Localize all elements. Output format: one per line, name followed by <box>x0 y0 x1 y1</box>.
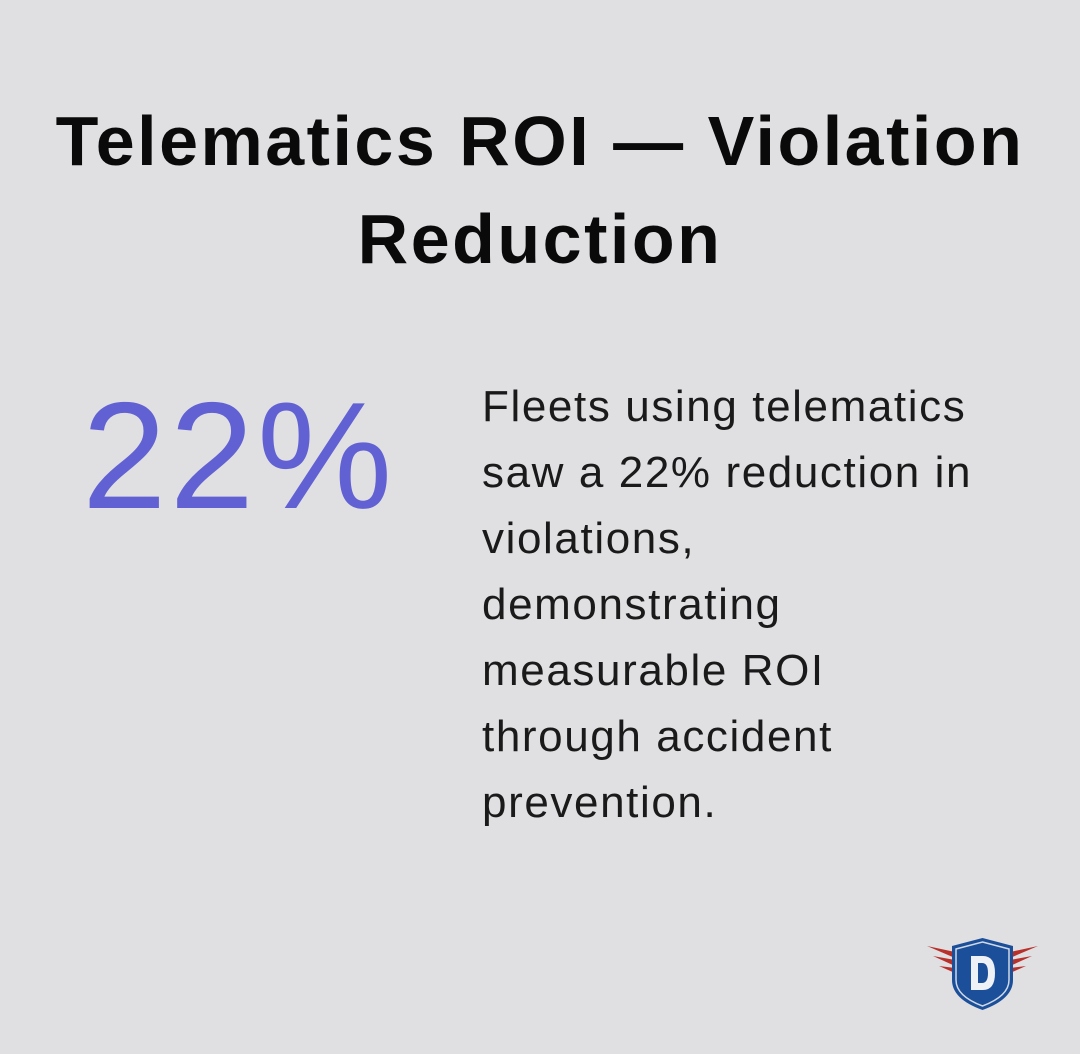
description text: measurable ROI <box>482 646 825 695</box>
title: Telematics ROI — Violation <box>56 102 1024 180</box>
title <box>56 102 1024 278</box>
description text: prevention. <box>482 778 717 827</box>
description text: violations, <box>482 514 695 563</box>
description text: Fleets using telematics <box>482 382 966 431</box>
icon: shield logo <box>927 938 1038 1010</box>
description text: saw a 22% reduction in <box>482 448 972 497</box>
title: Reduction <box>358 200 722 278</box>
description text <box>482 382 972 827</box>
description text: through accident <box>482 712 833 761</box>
description text: demonstrating <box>482 580 782 629</box>
big stat: 22%: 22% <box>82 371 395 541</box>
